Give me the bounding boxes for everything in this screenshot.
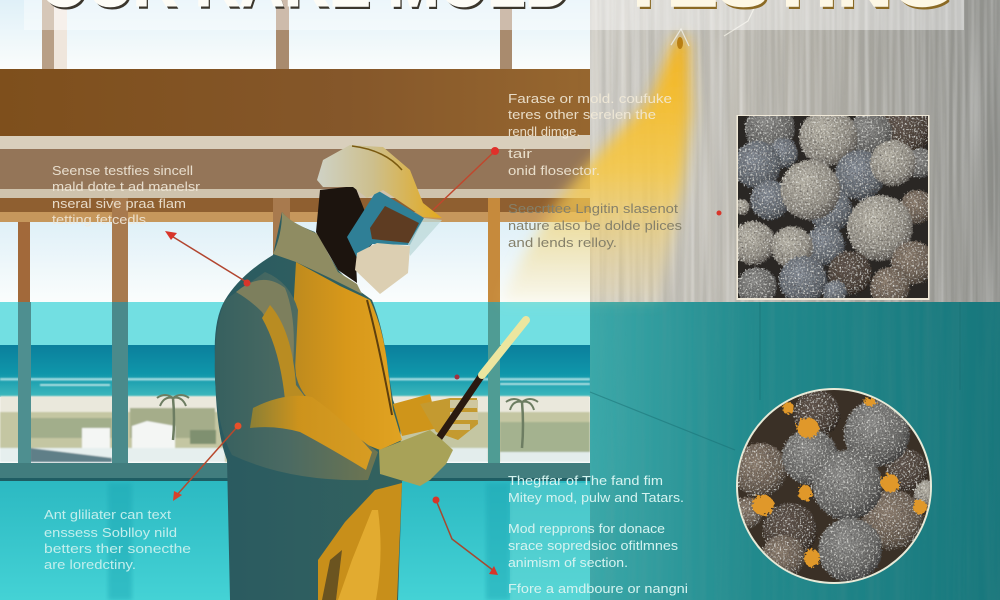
wall panel: lower teal wood bbox=[590, 302, 1000, 600]
mold spore cluster bbox=[738, 116, 928, 298]
near glove bbox=[379, 430, 453, 486]
text block: upper right, second note: and lends relloy. bbox=[508, 236, 617, 250]
text block: upper right, first note: Farase or mold. coufuke bbox=[508, 92, 672, 106]
wall panel: upper grey wood bbox=[590, 0, 1000, 303]
text block: upper left: tetting fetcedls bbox=[52, 213, 146, 227]
text block: lower centre: srace sopredsioc ofitlmnes bbox=[508, 539, 678, 553]
icon: wall crack bbox=[671, 2, 757, 49]
circular mold micrograph bbox=[731, 388, 940, 584]
callout arrow: upper right bbox=[433, 147, 499, 210]
callout arrow: upper left bbox=[165, 231, 250, 286]
text block: upper right, first note: tair bbox=[508, 147, 532, 161]
text block: lower left: are loredctiny. bbox=[44, 558, 136, 572]
text block: upper right, second note: Seecrttee Lngitin slasenot bbox=[508, 202, 679, 216]
text block: lower centre: Mod repprons for donace bbox=[508, 522, 665, 536]
text block: upper left: nseral sive praa flam bbox=[52, 197, 186, 211]
title text bbox=[40, 0, 954, 23]
face bbox=[370, 206, 419, 243]
text block: upper right, first note: onid flosector. bbox=[508, 164, 600, 178]
callout arrow: lower left bbox=[173, 422, 242, 501]
text block: upper right, second note bbox=[508, 202, 682, 250]
inspection tool bbox=[437, 320, 526, 441]
text block: upper right, second note: nature also be dolde plices bbox=[508, 219, 682, 233]
worker in protective suit bbox=[215, 145, 526, 600]
callout marker: tool dot bbox=[454, 374, 460, 380]
text block: upper left: mald dote t ad manelsr bbox=[52, 180, 200, 194]
respirator mask bbox=[355, 243, 410, 294]
callout marker: wall dot bbox=[716, 210, 722, 216]
face shield frame bbox=[347, 190, 424, 258]
text block: lower left bbox=[44, 508, 191, 572]
text block: upper right, first note bbox=[508, 92, 672, 178]
text block: lower centre bbox=[508, 474, 688, 596]
text block: lower centre: Ffore a amdboure or nangni bbox=[508, 582, 688, 596]
text block: upper left bbox=[52, 164, 200, 227]
shoulder highlight bbox=[236, 280, 294, 375]
suit front gold panel bbox=[292, 262, 402, 450]
helmet bbox=[317, 145, 442, 218]
text block: upper right, first note: rendl dimge. bbox=[508, 125, 580, 139]
text block: lower left: Ant gliliater can text bbox=[44, 508, 172, 522]
clear visor bbox=[408, 218, 442, 256]
text block: lower centre: Mitey mod, pulw and Tatars. bbox=[508, 491, 684, 505]
text block: lower centre: Thegffar of The fand fim bbox=[508, 474, 663, 488]
sleeve arm bbox=[215, 272, 378, 480]
text block: upper right, first note: teres other serelen the bbox=[508, 108, 656, 122]
title banner bbox=[24, 0, 964, 30]
brown band edge kept over beam bbox=[0, 69, 578, 136]
window frames bbox=[0, 198, 590, 482]
neck and head bbox=[316, 186, 376, 283]
suit zipper bbox=[367, 300, 392, 415]
callout arrow: lower centre bbox=[432, 496, 498, 575]
spore cluster with yellow tufts bbox=[731, 390, 940, 582]
palm trees bbox=[157, 395, 538, 448]
text block: lower left: betters ther sonecthe bbox=[44, 542, 191, 556]
far glove bbox=[420, 398, 478, 440]
far forearm bbox=[393, 394, 438, 436]
forearm highlight bbox=[250, 396, 372, 470]
suit body bbox=[215, 212, 402, 600]
hood collar bbox=[273, 212, 362, 294]
square mold micrograph bbox=[736, 115, 930, 300]
background: beach house interior with windows bbox=[0, 0, 590, 600]
text block: lower left: enssess Soblloy nild bbox=[44, 526, 177, 540]
light beam from wall crack bbox=[500, 38, 691, 302]
suit lower gold panel bbox=[318, 483, 402, 600]
text block: upper left: Seense testfies sincell bbox=[52, 164, 193, 178]
text block: lower centre: animism of section. bbox=[508, 556, 628, 570]
